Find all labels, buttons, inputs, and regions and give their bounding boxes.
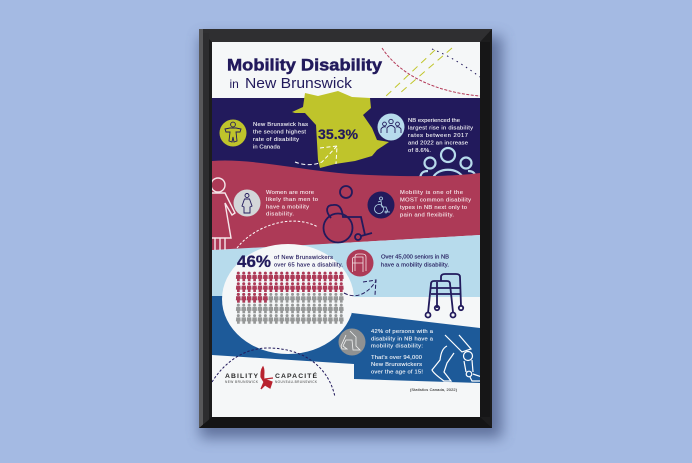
title: Mobility Disability [227, 56, 383, 74]
map: New Brunswick [292, 91, 389, 168]
icon: person in lime circle [220, 120, 246, 146]
icon: leg with knee brace [432, 335, 482, 381]
text: 42 percent: 42% of persons with a [371, 329, 434, 335]
text: seniors: Over 45,000 seniors in NB [381, 254, 449, 260]
text: seniors: have a mobility disability. [381, 262, 449, 268]
chart: 46 of 100 pictogram [236, 272, 344, 324]
frame shadow [200, 36, 502, 438]
logo: Ability Capacité [225, 367, 318, 389]
text: 46 percent description [274, 255, 343, 268]
text: largest rise: rates between 2017 [408, 133, 468, 139]
text: mobility most common: types in NB next only to [400, 205, 467, 211]
title: New Brunswick [245, 75, 353, 92]
icon: woman in grey circle [234, 190, 260, 216]
text: 42 percent: mobility disability: [371, 344, 423, 350]
text: women: disability. [266, 212, 294, 218]
text: women: Women are more [266, 190, 314, 196]
logo: Ability Capacité: NEW BRUNSWICK [225, 380, 259, 384]
icon: wheelchair user large [324, 186, 372, 242]
title [228, 58, 382, 88]
arrow: dashed arrow on map [295, 146, 337, 165]
text: second highest rate: New Brunswick has [253, 122, 308, 128]
text: 46 percent description: of New Brunswickers [274, 255, 333, 261]
text: largest rise: and 2022 an increase [408, 140, 468, 146]
text: second highest rate: rate of disability [253, 137, 299, 143]
icon: group in light blue circle [378, 114, 404, 140]
text: 46 percent description: over 65 have a disability. [274, 262, 343, 268]
source note: (Statistics Canada, 2022) [410, 387, 458, 392]
text: mobility most common: MOST common disability [400, 198, 471, 204]
text: 42 percent: That's over 94,000 [371, 355, 422, 361]
arrow: dashed navy [344, 280, 376, 296]
text: mobility most common [400, 190, 471, 218]
text: 42 percent [371, 329, 434, 376]
title: in [230, 77, 239, 91]
panel: blue band [212, 296, 480, 383]
text: 42 percent: disability in NB have a [371, 336, 434, 342]
text: second highest rate: in Canada [253, 144, 281, 150]
arc: dashed navy lower [212, 348, 335, 397]
decorative dashed arcs top right [382, 48, 480, 97]
logo: Ability Capacité: ABILITY [225, 373, 258, 380]
text: second highest rate [253, 122, 308, 150]
arc: dashed white [237, 221, 318, 248]
icon: large walker [426, 274, 463, 318]
text: women [266, 190, 318, 218]
panel: light blue band [212, 235, 480, 297]
icon: woman outline figure [211, 178, 235, 250]
stat: 35.3%: 35.3% [318, 126, 359, 142]
panel: crimson band [212, 161, 480, 250]
text: women: have a mobility [266, 204, 309, 210]
text: largest rise: of 8.6%. [408, 148, 431, 154]
text: largest rise [408, 118, 473, 154]
text: 42 percent: over the age of 15! [371, 370, 423, 376]
icon: wheelchair in navy circle [368, 192, 394, 218]
logo: Ability Capacité: CAPACITÉ [275, 371, 317, 380]
text: women: likely than men to [266, 197, 318, 203]
icon: leg in grey circle [338, 328, 366, 356]
logo: Ability Capacité: NOUVEAU-BRUNSWICK [275, 380, 318, 384]
poster [211, 42, 482, 417]
icon: large group outline [420, 148, 476, 178]
text: mobility most common: pain and flexibility. [400, 212, 454, 218]
icon: walker in crimson circle [346, 250, 374, 276]
white circle [222, 244, 354, 354]
text: 42 percent: New Brunswickers [371, 362, 422, 368]
text: largest rise: NB experienced the [408, 118, 460, 124]
stat: 46%: 46% [237, 253, 271, 271]
picture frame [199, 29, 492, 428]
text: largest rise: largest rise in disability [408, 126, 473, 132]
text: mobility most common: Mobility is one of the [400, 190, 463, 196]
text: seniors [381, 254, 449, 268]
panel: navy band [212, 98, 480, 180]
text: second highest rate: the second highest [253, 130, 306, 136]
